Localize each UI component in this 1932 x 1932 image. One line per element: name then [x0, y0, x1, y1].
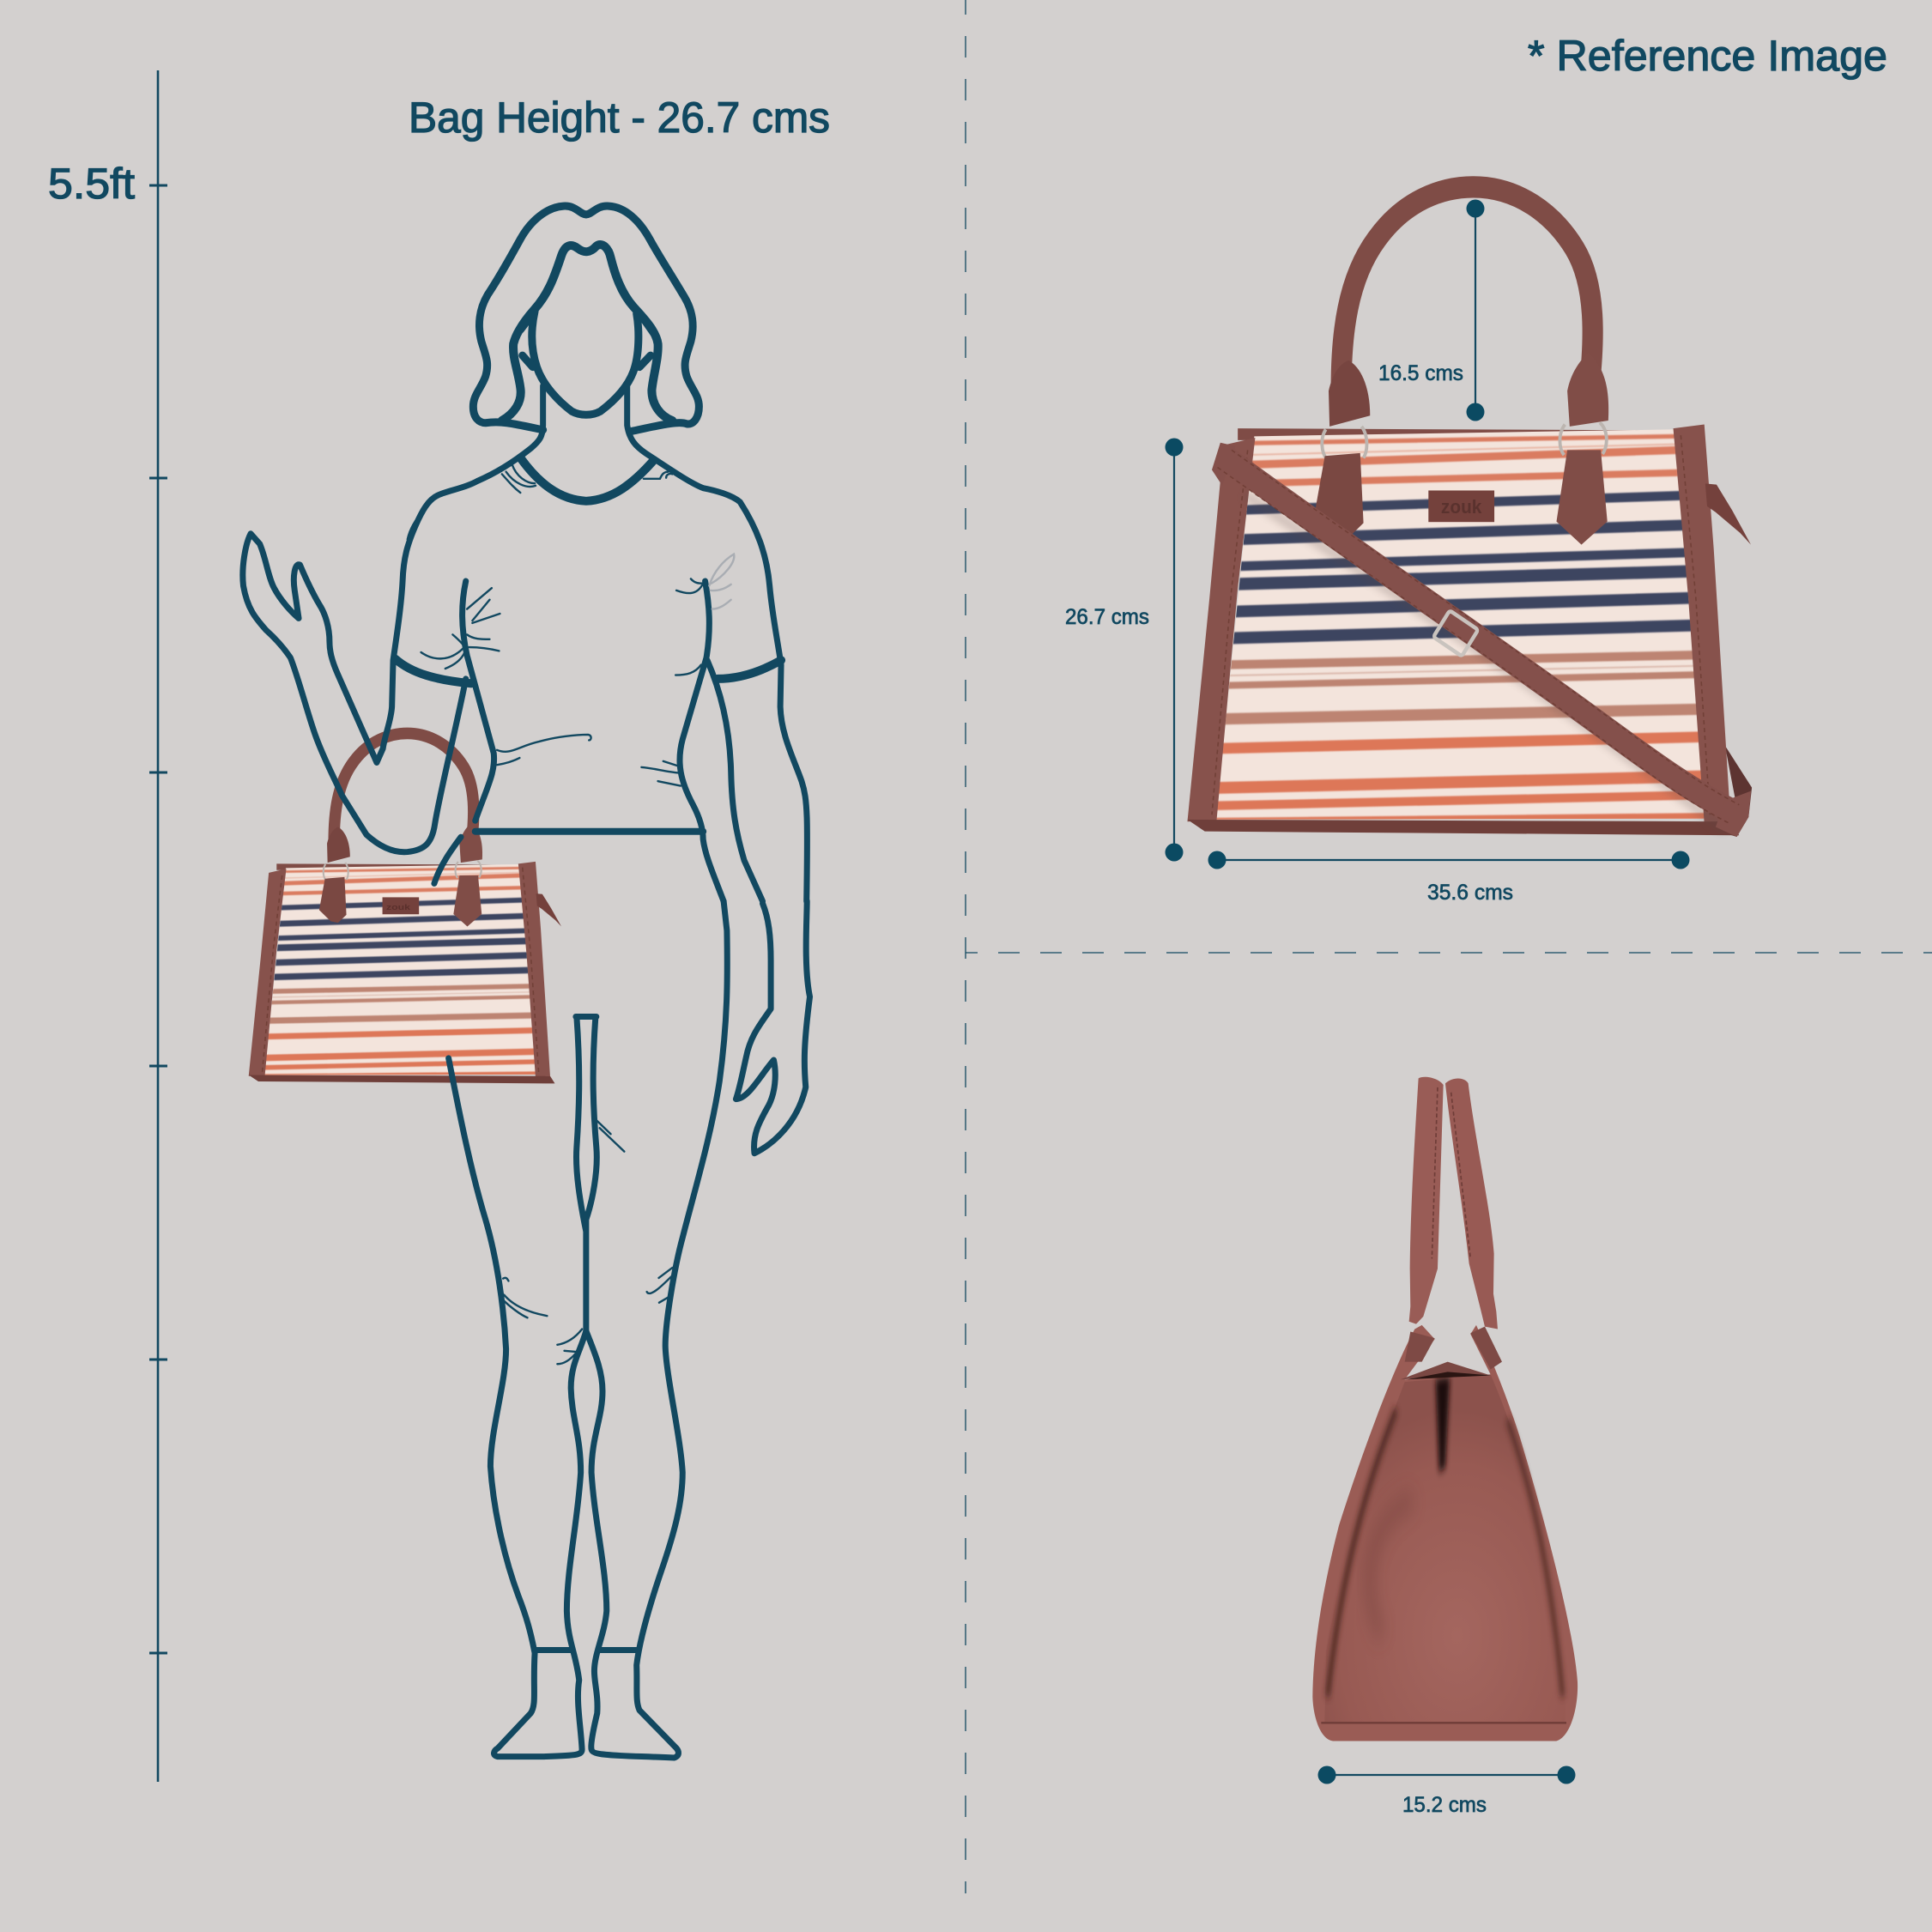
strap stitching [1218, 450, 1739, 823]
dimension: handle drop: 16.5 cms [1378, 361, 1463, 385]
bottom seam [1321, 1721, 1566, 1724]
head and hair [473, 206, 699, 431]
dimension: bag width [1208, 851, 1689, 905]
strap buckle [1433, 610, 1478, 657]
handles [1409, 1077, 1444, 1324]
dimension: bag width: 35.6 cms [1427, 881, 1513, 905]
zip opening [1401, 1362, 1491, 1379]
dimension: bag depth [1318, 1766, 1576, 1817]
center fold [1436, 1377, 1450, 1473]
torso and arms [243, 385, 807, 901]
strap shadow [1245, 494, 1725, 829]
upper flaps [1405, 1331, 1435, 1362]
dimension: bag height: 26.7 cms [1065, 605, 1149, 629]
dimension: bag height [1065, 438, 1183, 862]
logo patch text: zouk [1441, 496, 1482, 518]
clothing wrinkles [408, 465, 734, 1364]
side body [1312, 1325, 1578, 1741]
crossbody strap [1225, 457, 1739, 815]
front view bag with strap [1187, 187, 1752, 837]
reference note: * Reference Image [1528, 32, 1887, 80]
side view bag [1312, 1077, 1578, 1741]
legs and right hand [449, 901, 810, 1758]
figure outline [243, 206, 810, 1758]
height scale axis [149, 70, 167, 1782]
bag carried by the figure [249, 733, 561, 1083]
height label: 5.5ft [48, 160, 135, 208]
dimension: bag depth: 15.2 cms [1402, 1793, 1487, 1817]
title: Bag Height - 26.7 cms [409, 94, 830, 142]
handle seams [1432, 1087, 1470, 1258]
dimension: handle drop [1378, 199, 1485, 421]
inner shading [1328, 1409, 1396, 1697]
quadrant dividers [966, 0, 1932, 1893]
bag carried by the figure: zouk [386, 903, 411, 911]
